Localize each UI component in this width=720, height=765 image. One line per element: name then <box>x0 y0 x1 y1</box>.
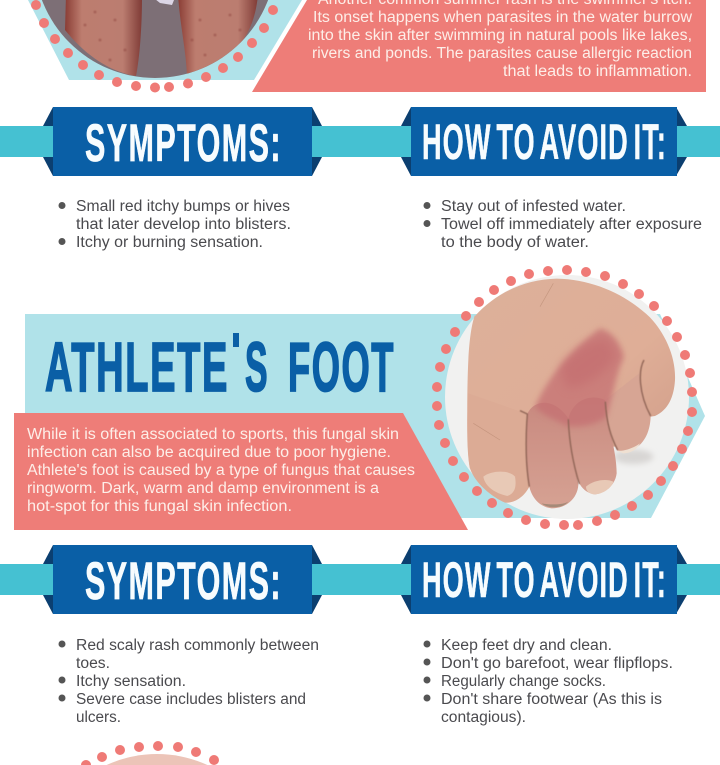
list: how to avoid 2: Regularly change socks. <box>441 673 606 690</box>
list: how to avoid 2: contagious). <box>441 709 526 726</box>
banner: how to avoid it 2 <box>401 545 720 614</box>
title: athlete's foot: ATHLETE <box>45 328 229 406</box>
hexagon background: swimmer's itch <box>28 0 302 80</box>
list: how to avoid 1: Towel off immediately after exposure <box>441 216 702 233</box>
list: symptoms 2: Itchy sensation. <box>76 673 186 690</box>
description text: athlete's foot: Athlete's foot is caused by a type of fungus that causes <box>27 462 415 479</box>
foot body and toes <box>467 279 675 508</box>
toenails <box>483 472 516 496</box>
list: symptoms 2: Severe case includes blisters and <box>76 691 306 708</box>
photo: athlete's foot <box>445 275 689 519</box>
list: symptoms 1: Itchy or burning sensation. <box>76 234 263 251</box>
hairs <box>473 283 553 440</box>
list: how to avoid 2: Don't go barefoot, wear flipflops. <box>441 655 673 672</box>
banner: symptoms 2 <box>0 545 412 614</box>
list: symptoms 2: Red scaly rash commonly between <box>76 637 319 654</box>
description text: swimmer's itch: into the skin after swimming in natural pools like lakes, <box>308 27 692 44</box>
title: athlete's foot: FOOT <box>288 328 395 406</box>
next section photo: partial <box>81 741 219 765</box>
heading: symptoms: SYMPTOMS: <box>85 552 282 611</box>
list: symptoms 1: that later develop into blisters. <box>76 216 291 233</box>
description text: swimmer's itch: rivers and ponds. The parasites cause allergic reaction <box>312 45 692 62</box>
dotted ring: top photo <box>31 0 278 92</box>
list: how to avoid 1 <box>424 198 702 251</box>
list: how to avoid 2: Keep feet dry and clean. <box>441 637 612 654</box>
panel: athlete's foot header <box>14 265 705 530</box>
description text: athlete's foot: While it is often associated to sports, this fungal skin <box>27 426 399 443</box>
banner: symptoms 1 <box>0 107 412 176</box>
panel: swimmer's itch header <box>28 0 706 92</box>
list: symptoms 1: Small red itchy bumps or hives <box>76 198 290 215</box>
list: symptoms 2: toes. <box>76 655 110 672</box>
title: athlete's foot: S <box>245 328 269 406</box>
description text: swimmer's itch <box>308 0 693 80</box>
heading: symptoms: SYMPTOMS: <box>85 114 282 173</box>
list: how to avoid 1: to the body of water. <box>441 234 589 251</box>
dotted ring: foot photo <box>432 265 697 530</box>
description text: athlete's foot: hot-spot for this fungal skin infection. <box>27 498 292 515</box>
list: how to avoid 1: Stay out of infested water. <box>441 198 626 215</box>
list: symptoms 2: ulcers. <box>76 709 121 726</box>
list: symptoms 2 <box>58 637 319 726</box>
description panel: athlete's foot <box>14 413 468 530</box>
description text: athlete's foot <box>27 426 415 515</box>
hexagon background: athlete's foot <box>25 314 705 518</box>
rash <box>535 328 624 427</box>
list: how to avoid 2: Don't share footwear (As this is <box>441 691 662 708</box>
toe gaps <box>520 360 651 487</box>
description panel: swimmer's itch <box>252 0 706 92</box>
list: symptoms 1 <box>58 198 291 251</box>
description text: swimmer's itch: that leads to inflammation. <box>503 63 692 80</box>
description text: athlete's foot: infection can also be acquired due to poor hygiene. <box>27 444 391 461</box>
dotted ring: bottom photo <box>81 741 219 765</box>
description text: athlete's foot: ringworm. Dark, warm and damp environment is a <box>27 480 379 497</box>
description text: swimmer's itch: Its onset happens when parasites in the water burrow <box>313 9 693 26</box>
banner: how to avoid it 1 <box>401 107 720 176</box>
photo: rash on legs <box>42 0 268 78</box>
list: how to avoid 2 <box>424 637 673 726</box>
